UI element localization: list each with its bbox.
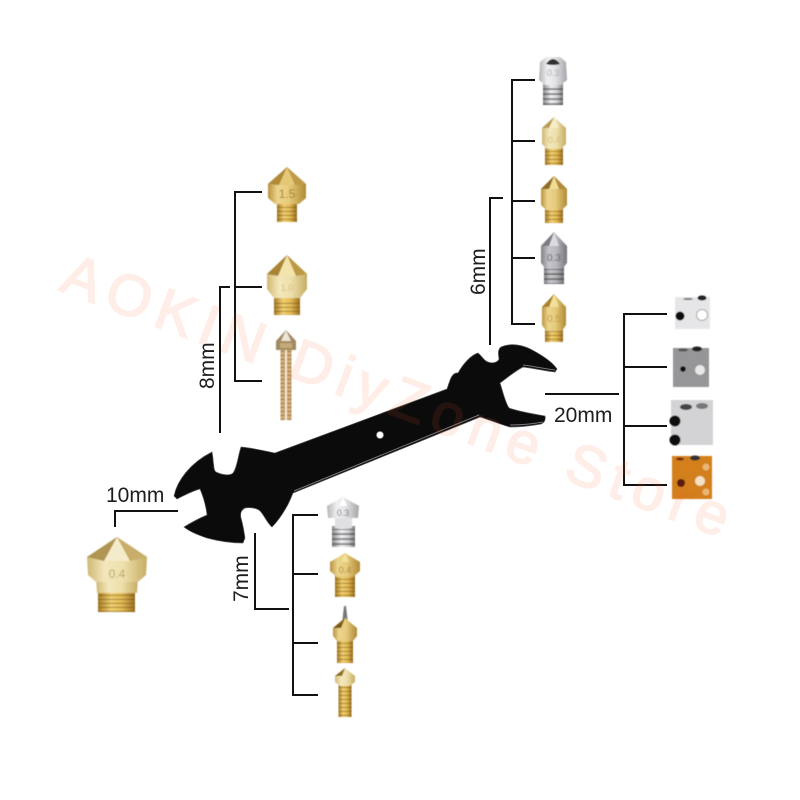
label: 10mm: 10mm [106, 484, 164, 507]
bracket: 7mm [230, 515, 318, 695]
nozzle pale brass [542, 117, 566, 165]
label: 20mm: 20mm [554, 404, 612, 427]
nozzle silver socket: 0.3 [547, 68, 559, 78]
nozzles: 7mm group [327, 497, 360, 717]
nozzles: 6mm group [539, 57, 567, 342]
nozzle: 10mm large [87, 537, 147, 612]
nozzle large [267, 255, 307, 315]
bracket: 20mm [545, 314, 667, 485]
nozzle pale brass: 0.4 [548, 135, 560, 145]
label: 6mm: 6mm [467, 248, 490, 295]
label: 7mm: 7mm [230, 555, 253, 602]
nozzle: 10mm large: 0.4 [109, 567, 126, 581]
wrench edge highlight [294, 365, 555, 491]
nozzle dark steel [541, 232, 567, 284]
heater blocks: 20mm group [670, 296, 713, 499]
watermark: AOKIN DiyZone Store [53, 241, 746, 553]
wrench center hole [376, 432, 384, 438]
nozzle volcano [335, 668, 355, 717]
nozzle silver V6 [327, 497, 359, 547]
block grey [673, 346, 709, 387]
nozzle 1.5: 1.5 [279, 187, 296, 201]
nozzle brass V6 [330, 553, 360, 597]
nozzles: 8mm group [267, 167, 307, 420]
nozzle silver socket [539, 57, 567, 105]
nozzle dark steel: 0.3 [547, 253, 561, 264]
nozzle silver V6: 0.3 [337, 508, 349, 518]
nozzle large: 1.0 [281, 283, 293, 293]
nozzle needle tip [333, 606, 357, 663]
wrench [174, 345, 557, 543]
nozzle 1.5 [268, 167, 306, 222]
block silver with screws [670, 400, 713, 446]
label: 8mm: 8mm [196, 342, 219, 389]
nozzle brass V6: 0.4 [339, 565, 351, 575]
bracket: 8mm [196, 192, 262, 433]
nozzle long [276, 330, 296, 420]
nozzle gold [542, 294, 566, 342]
block white [675, 296, 710, 329]
block orange [672, 456, 712, 499]
nozzle gold: 0.5 [547, 314, 561, 325]
nozzle brass [541, 176, 567, 223]
bracket: 6mm [467, 80, 535, 345]
bracket: 10mm [106, 484, 178, 527]
